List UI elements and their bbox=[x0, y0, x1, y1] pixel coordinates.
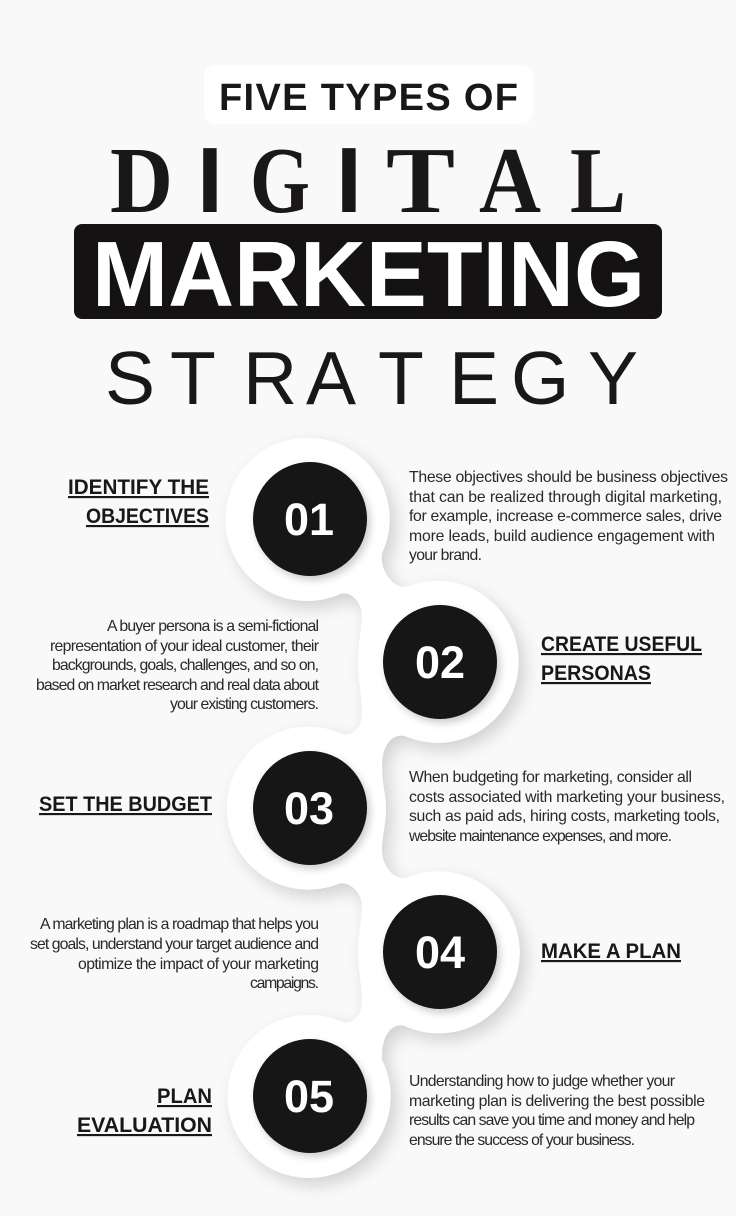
step 03 number badge bbox=[253, 751, 367, 865]
step 03 description: costs associated with marketing your business, bbox=[409, 789, 725, 806]
title line: strategy: STRATEGY bbox=[105, 336, 638, 420]
step 05 description: marketing plan is delivering the best possible bbox=[409, 1093, 705, 1110]
step 01 bbox=[68, 462, 728, 576]
step 04 bbox=[30, 895, 681, 1009]
title line: digital: T bbox=[386, 129, 455, 233]
step 01 heading: OBJECTIVES bbox=[86, 504, 209, 528]
step 01 description: more leads, build audience engagement with bbox=[409, 528, 715, 545]
step 01 description: your brand. bbox=[409, 547, 482, 564]
step 05 number badge bbox=[253, 1039, 367, 1153]
step 02 description: backgrounds, goals, challenges, and so on, bbox=[52, 657, 319, 674]
step 03 bbox=[39, 751, 725, 865]
step 03 description: website maintenance expenses, and more. bbox=[408, 828, 672, 845]
step 02 number badge: 02 bbox=[415, 637, 465, 688]
step 01 description: These objectives should be business objectives bbox=[409, 469, 728, 486]
step 02 number badge bbox=[383, 605, 497, 719]
step 01 heading: IDENTIFY THE bbox=[68, 475, 209, 499]
step 03 number badge: 03 bbox=[284, 783, 334, 834]
title line: digital: I bbox=[197, 128, 223, 232]
step 05 number badge: 05 bbox=[284, 1071, 334, 1122]
step 05 heading bbox=[77, 1084, 212, 1137]
step 02 heading: PERSONAS bbox=[541, 661, 651, 685]
step 01 description: for example, increase e-commerce sales, drive bbox=[409, 508, 722, 525]
step 01 description bbox=[409, 469, 728, 564]
step 02 bbox=[36, 605, 702, 719]
step 02 description: based on market research and real data about bbox=[36, 677, 320, 694]
step 05 heading: EVALUATION bbox=[77, 1113, 212, 1137]
step 05 description bbox=[409, 1073, 705, 1149]
step 01 number badge bbox=[253, 462, 367, 576]
title line: digital: G bbox=[250, 129, 310, 233]
step 02 heading bbox=[541, 632, 702, 685]
step 05 description: Understanding how to judge whether your bbox=[409, 1073, 675, 1090]
step 02 heading: CREATE USEFUL bbox=[541, 632, 702, 656]
step 03 description: such as paid ads, hiring costs, marketing tools, bbox=[409, 808, 720, 825]
title line: marketing banner: MARKETING bbox=[92, 222, 645, 326]
step 04 description: A marketing plan is a roadmap that helps you bbox=[40, 916, 319, 933]
title line: digital: L bbox=[570, 129, 626, 233]
step 02 description bbox=[36, 618, 320, 713]
step 05 heading: PLAN bbox=[157, 1084, 212, 1108]
title line: five types of bbox=[204, 65, 533, 124]
step 02 description: A buyer persona is a semi-fictional bbox=[107, 618, 319, 635]
title bbox=[74, 65, 662, 420]
step 03 description: When budgeting for marketing, consider all bbox=[409, 769, 692, 786]
title line: digital bbox=[110, 128, 626, 233]
timeline ribbon bbox=[226, 438, 520, 1178]
step 01 heading bbox=[68, 475, 209, 528]
step 05 description: results can save you time and money and help bbox=[409, 1112, 695, 1129]
step 04 description: campaigns. bbox=[250, 975, 319, 992]
step 04 number badge bbox=[383, 895, 497, 1009]
title line: digital: I bbox=[336, 128, 362, 232]
step 02 description: your existing customers. bbox=[170, 696, 319, 713]
step 04 description: optimize the impact of your marketing bbox=[78, 956, 319, 973]
step 02 description: representation of your ideal customer, their bbox=[50, 638, 319, 655]
title line: digital: D bbox=[110, 129, 173, 233]
step 04 description: set goals, understand your target audience and bbox=[30, 936, 319, 953]
step 03 description bbox=[408, 769, 725, 845]
step 04 number badge: 04 bbox=[415, 927, 465, 978]
step 03 heading: SET THE BUDGET bbox=[39, 792, 212, 816]
step 01 number badge: 01 bbox=[284, 494, 334, 545]
title line: digital: A bbox=[479, 129, 541, 233]
step 04 description bbox=[30, 916, 319, 992]
step 01 description: that can be realized through digital marketing, bbox=[409, 489, 722, 506]
step 04 heading: MAKE A PLAN bbox=[541, 939, 681, 963]
title line: five types of: FIVE TYPES OF bbox=[219, 77, 518, 119]
step 05 bbox=[77, 1039, 705, 1153]
step 05 description: ensure the success of your business. bbox=[409, 1132, 635, 1149]
